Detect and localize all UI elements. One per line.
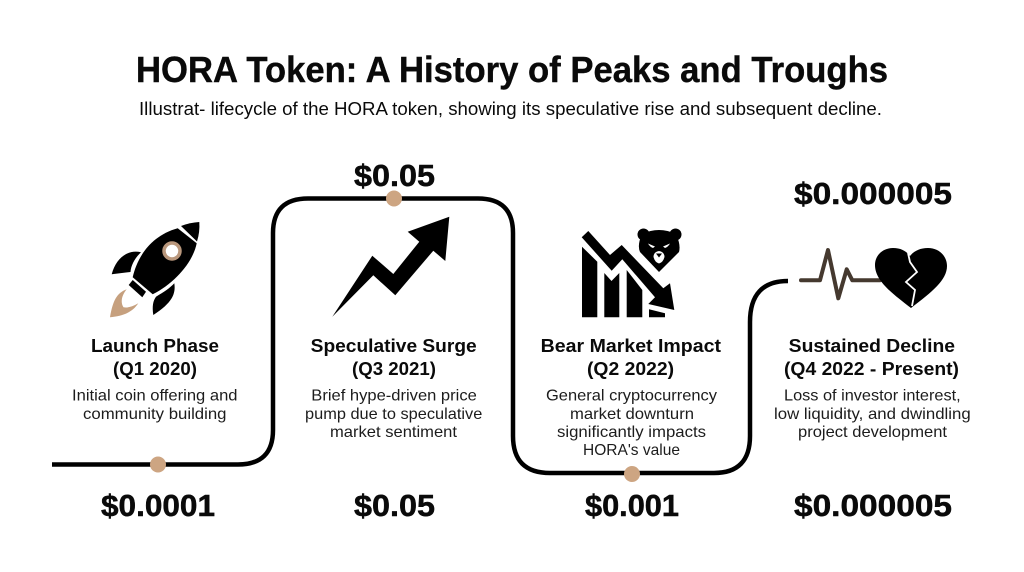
step 1: launch phase text: (Q1 2020) [113,358,197,379]
step 4: sustained decline text [774,335,971,441]
price: decline top: $0.000005 [794,176,952,211]
subtitle: Illustrat- lifecycle of the HORA token, showing its speculative rise and subsequent decline. [139,98,882,119]
icon: rocket [110,222,199,317]
step 2: speculative surge text: pump due to speculative [305,406,482,423]
icon: bear head [638,228,682,272]
step 4: sustained decline text: low liquidity, and dwindling [774,406,971,423]
step 4: sustained decline text: Sustained Decline [789,335,955,356]
step 4: sustained decline text: (Q4 2022 - Present) [784,358,959,379]
timeline line with price markers [52,190,788,482]
icon: broken heart [875,248,947,308]
step 3: bear market impact text: (Q2 2022) [587,358,674,379]
step 3: bear market impact text: Bear Market Impact [541,335,721,356]
price: bear market: $0.001 [585,488,679,523]
price: launch: $0.0001 [101,488,215,523]
icon: heartbeat line [801,250,880,298]
step 3: bear market impact text [541,335,721,459]
step 1: launch phase text [72,335,238,423]
title: HORA Token: A History of Peaks and Troughs [136,49,888,90]
step 3: bear market impact text: HORA's value [583,442,680,459]
step 3: bear market impact text: significantly impacts [557,424,706,441]
step 2: speculative surge text [305,335,482,441]
price: surge peak: $0.05 [354,158,435,193]
step 2: speculative surge text: Speculative Surge [311,335,477,356]
step 3: bear market impact text: market downturn [570,406,694,423]
icon: rising zigzag arrow [332,217,449,317]
step 4: sustained decline text: Loss of investor interest, [784,388,961,404]
step 3: bear market impact text: General cryptocurrency [546,388,717,404]
step 2: speculative surge text: market sentiment [330,424,458,441]
step 1: launch phase text: Initial coin offering and [72,388,238,404]
step 2: speculative surge text: Brief hype-driven price [311,388,477,404]
icon: bear market chart [582,228,682,317]
step 2: speculative surge text: (Q3 2021) [352,358,436,379]
step 1: launch phase text: community building [83,406,226,423]
price: decline: $0.000005 [794,488,952,523]
step 1: launch phase text: Launch Phase [91,335,219,356]
step 4: sustained decline text: project development [798,424,948,441]
price: surge: $0.05 [354,488,435,523]
